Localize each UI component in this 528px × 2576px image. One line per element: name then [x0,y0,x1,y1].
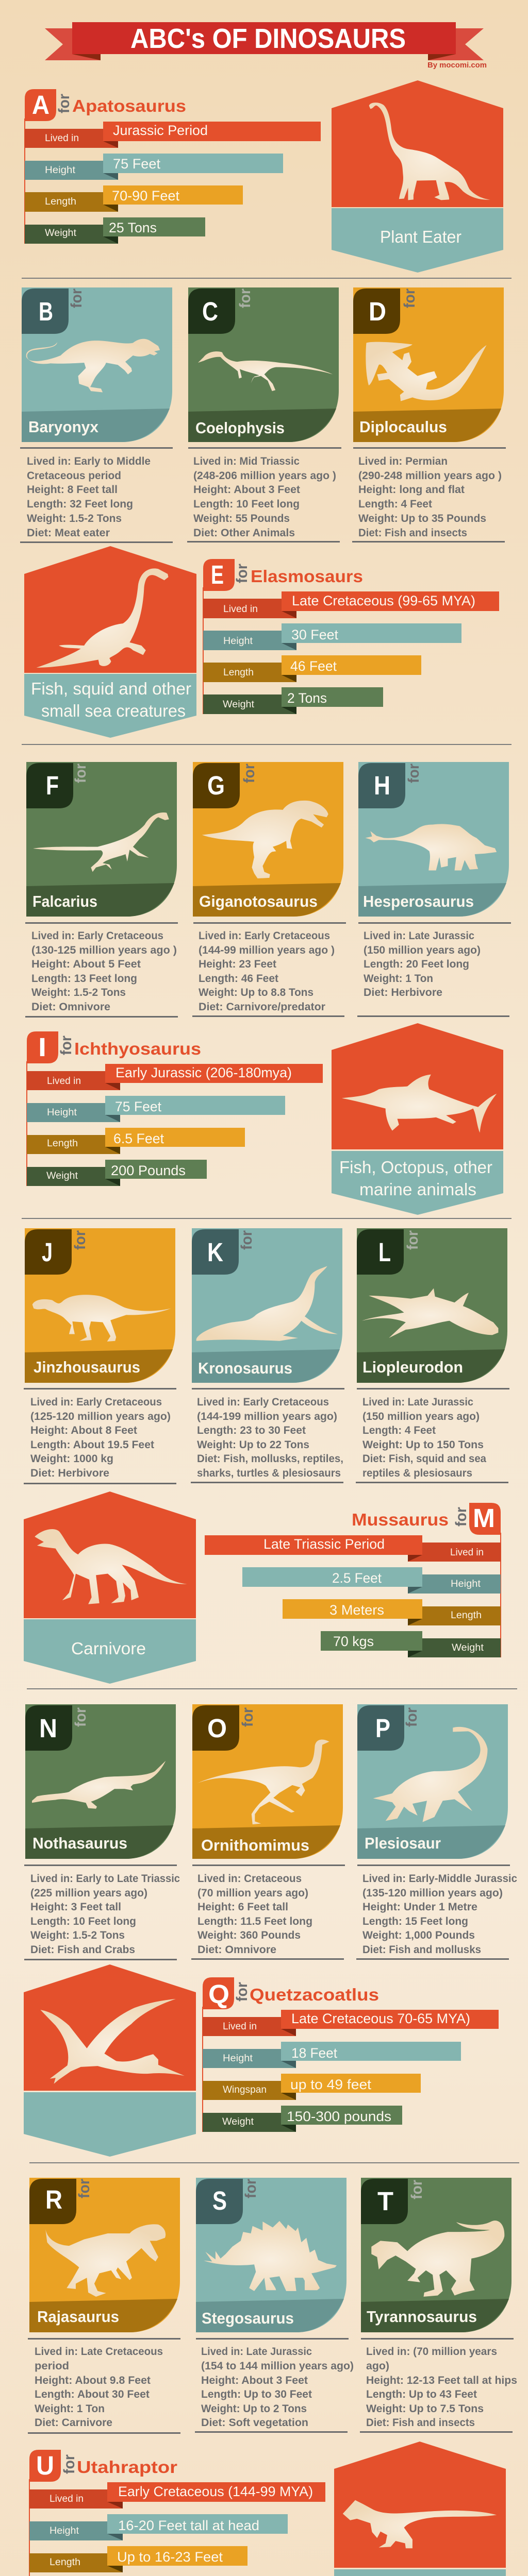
text: Coelophysis facts: (248-206 million years ago ) [193,470,336,482]
text: Stegosaurus facts: Diet: Soft vegetation [201,2417,308,2429]
panel: M Mussaurus: Mussaurus [352,1510,449,1529]
panel: G Giganotosaurus: G [207,771,225,800]
panel: L Liopleurodon: for [404,1230,421,1250]
text: Falcarius facts: Length: 13 Feet long [31,973,137,985]
text: Diplocaulus facts: Length: 4 Feet [358,498,432,510]
panel: R Rajasaurus: for [76,2179,93,2198]
panel: P Plesiosaur: for [403,1707,420,1727]
text: Ornithomimus facts: Weight: 360 Pounds [197,1929,301,1941]
panel: M Mussaurus: 70 kgs [333,1634,374,1649]
icon: Elasmosaurus silhouette [37,568,169,668]
panel: Q Quetzacoatlus [202,1977,499,2132]
panel: D Diplocaulus: Diplocaulus [359,418,447,436]
panel: I Ichthyosaurus: Height [47,1107,77,1118]
panel: E Elasmosaurs: 2 Tons [287,690,327,706]
text: Plesiosaur facts: Diet: Fish and mollusks [362,1944,481,1956]
panel: K Kronosaurus: Kronosaurus [198,1359,292,1377]
panel: J Jinzhousaurus: Jinzhousaurus [34,1358,140,1376]
panel: U Utahraptor: Utahraptor [77,2458,177,2477]
panel: O Ornithomimus: O [207,1714,227,1743]
panel: A Apatosaurus: for [56,94,73,113]
panel: Q Quetzacoatlus: 18 Feet [291,2045,337,2061]
panel: Apatosaurus diet badge [332,80,503,273]
text: Kronosaurus facts: sharks, turtles & plesiosaurs [197,1467,341,1479]
panel: B Baryonyx: B [39,297,53,326]
panel: G Giganotosaurus: for [241,764,258,783]
panel: Q Quetzacoatlus: Quetzacoatlus [250,1985,379,2004]
panel: R Rajasaurus: Rajasaurus [37,2308,119,2326]
panel: A Apatosaurus: 25 Tons [109,220,157,235]
icon: Tyrannosaurus silhouette [371,2221,504,2297]
text: Coelophysis facts: Lived in: Mid Triassic [193,455,300,467]
panel: J Jinzhousaurus: for [72,1230,89,1250]
text: Baryonyx facts: Height: 8 Feet tall [27,484,118,496]
panel: M Mussaurus: Height [451,1579,481,1589]
text: Coelophysis facts: Length: 10 Feet long [193,498,300,510]
text: Diplocaulus facts: Lived in: Permian [358,455,448,467]
icon: Utahraptor silhouette [343,2500,497,2548]
panel: Q Quetzacoatlus: Wingspan [223,2084,267,2095]
panel: Q Quetzacoatlus: Lived in [223,2021,257,2032]
text: Diplocaulus facts: Diet: Fish and insects [358,527,467,539]
text: Rajasaurus facts: Lived in: Late Cretaceous [35,2346,163,2358]
text: Plesiosaur facts [362,1873,517,1956]
panel: R Rajasaurus: R [45,2185,62,2214]
text: Falcarius facts: Height: About 5 Feet [31,958,141,970]
text: Ornithomimus facts: Diet: Omnivore [197,1944,276,1956]
text: Stegosaurus facts: Lived in: Late Jurassic [201,2346,312,2358]
panel: O Ornithomimus [191,1704,345,1960]
panel: N Nothasaurus: for [72,1707,89,1727]
panel: M Mussaurus: Length [451,1610,482,1621]
panel: Q Quetzacoatlus: Weight [222,2116,254,2127]
text: Liopleurodon facts [362,1396,486,1479]
text: Stegosaurus facts: Height: About 3 Feet [201,2375,308,2386]
text: Coelophysis facts: Weight: 55 Pounds [193,513,290,524]
text: Stegosaurus facts: Weight: Up to 2 Tons [201,2403,307,2415]
text: Nothasaurus facts: Lived in: Early to Late Triassic [30,1873,180,1885]
text: Jinzhousaurus facts: Length: About 19.5 Feet [30,1439,154,1451]
panel: U Utahraptor: for [61,2454,78,2474]
text: Baryonyx facts: Diet: Meat eater [27,527,110,539]
text: Giganotosaurus facts: Diet: Carnivore/predator [199,1001,325,1013]
text: Hesperosaurus facts: Lived in: Late Jurassic [364,930,474,942]
panel: S Stegosaurus: Stegosaurus [202,2309,294,2327]
text: Tyrannosaurus facts: Weight: Up to 7.5 Tons [366,2403,484,2415]
text: Hesperosaurus facts: Diet: Herbivore [364,987,442,998]
panel: E Elasmosaurs: Length [223,667,254,678]
panel: E Elasmosaurs: Elasmosaurs [251,567,363,586]
text: Plesiosaur facts: Height: Under 1 Metre [362,1901,477,1913]
text: Tyrannosaurus facts: Diet: Fish and insects [366,2417,475,2429]
panel: I Ichthyosaurus: Lived in [47,1076,81,1087]
text: Coelophysis facts: Diet: Other Animals [193,527,295,539]
panel: Ichthyosaurus diet badge [332,1023,503,1215]
panel: H Hesperosaurus: Hesperosaurus [363,892,474,910]
text: Plesiosaur facts: Length: 15 Feet long [362,1916,468,1927]
icon: Mussaurus silhouette [35,1529,187,1604]
text: Kronosaurus facts: Lived in: Early Cretaceous [197,1396,329,1408]
panel: D Diplocaulus: for [401,289,418,308]
panel: U Utahraptor: Length [50,2557,80,2568]
panel: S Stegosaurus: for [242,2179,259,2198]
panel: M Mussaurus: for [453,1507,470,1527]
text: Baryonyx facts: Lived in: Early to Middle [27,455,151,467]
text: Ornithomimus facts: (70 million years ago) [197,1887,308,1899]
panel: Quetzacoatlus diet badge [24,1964,196,2157]
panel: I Ichthyosaurus: Ichthyosaurus [74,1039,201,1058]
text: Nothasaurus facts: (225 million years ago) [30,1887,147,1899]
text: Liopleurodon facts: Diet: Fish, squid and sea [362,1453,486,1465]
panel: L Liopleurodon: Liopleurodon [362,1358,463,1376]
panel: K Kronosaurus: K [207,1238,223,1267]
panel: E Elasmosaurs: Weight [223,699,255,710]
text: Tyrannosaurus facts: ago) [366,2360,389,2372]
panel: E Elasmosaurs: Lived in [223,604,258,615]
panel: N Nothasaurus: N [39,1714,57,1743]
panel: G Giganotosaurus: Giganotosaurus [199,892,318,910]
text: Nothasaurus facts: Weight: 1.5-2 Tons [30,1929,125,1941]
text: Stegosaurus facts: Length: Up to 30 Feet [201,2388,312,2400]
panel: S Stegosaurus [195,2178,354,2433]
panel: O Ornithomimus: for [239,1707,256,1727]
panel: C Coelophysis: Coelophysis [195,419,285,437]
text: Falcarius facts [31,930,177,1013]
text: Falcarius facts: Diet: Omnivore [31,1001,110,1013]
panel: R Rajasaurus [28,2178,180,2434]
panel: T Tyrannosaurus: T [377,2187,393,2216]
panel: E Elasmosaurs: Late Cretaceous (99-65 MYA) [292,593,475,608]
icon: Quetzalcoatlus silhouette [40,1999,185,2084]
panel: Apatosaurus diet badge: Plant Eater [380,227,461,246]
byline: By mocomi.com [427,61,487,70]
text: Kronosaurus facts: Weight: Up to 22 Tons [197,1439,309,1451]
panel: M Mussaurus [205,1503,501,1657]
panel: Mussaurus diet badge [24,1492,196,1684]
panel: Elasmosaurs diet badge: Fish, squid and other [31,679,191,698]
panel: E Elasmosaurs: 30 Feet [291,627,338,642]
panel: M Mussaurus: 3 Meters [329,1602,384,1618]
icon: Nothasaurus silhouette [32,1761,166,1809]
text: Nothasaurus facts: Length: 10 Feet long [30,1916,136,1927]
text: Liopleurodon facts: Lived in: Late Jurassic [362,1396,473,1408]
text: Giganotosaurus facts: (144-99 million years ago ) [199,944,335,956]
panel: T Tyrannosaurus [360,2178,517,2433]
text: Hesperosaurus facts: (150 million years ago) [364,944,481,956]
panel: Q Quetzacoatlus: Height [223,2053,253,2064]
icon: Coelophysis silhouette [198,351,333,391]
panel: M Mussaurus: Weight [452,1642,484,1653]
text: Baryonyx facts: Weight: 1.5-2 Tons [27,513,122,524]
panel: A Apatosaurus: A [32,90,50,120]
panel: J Jinzhousaurus: J [42,1238,53,1267]
panel: A Apatosaurus: Weight [45,228,77,239]
text: Liopleurodon facts: Weight: Up to 150 Tons [362,1439,484,1451]
panel: U Utahraptor [29,2450,325,2576]
text: Jinzhousaurus facts: Lived in: Early Cretaceous [30,1396,162,1408]
text: Giganotosaurus facts: Length: 46 Feet [199,973,278,985]
panel: A Apatosaurus: 75 Feet [113,156,160,172]
icon: Liopleurodon silhouette [362,1289,498,1338]
text: Falcarius facts: Lived in: Early Cretaceous [31,930,163,942]
text: Plesiosaur facts: Weight: 1,000 Pounds [362,1929,475,1941]
panel: B Baryonyx: Baryonyx [28,418,99,436]
panel: M Mussaurus: M [473,1503,495,1533]
panel: U Utahraptor: Early Cretaceous (144-99 MYA) [118,2484,313,2499]
panel: L Liopleurodon [356,1228,509,1483]
panel: I Ichthyosaurus: 75 Feet [115,1099,161,1114]
icon: Baryonyx silhouette [26,339,160,393]
panel: A Apatosaurus: Lived in [45,133,79,144]
text: Ornithomimus facts [197,1873,312,1956]
panel: Utahraptor diet badge [334,2442,506,2576]
title banner [45,22,484,60]
panel: M Mussaurus: Lived in [450,1547,484,1558]
panel: B Baryonyx: for [68,289,85,308]
text: Kronosaurus facts [197,1396,343,1479]
text: Diplocaulus facts: Height: long and flat [358,484,465,496]
text: Kronosaurus facts: Length: 23 to 30 Feet [197,1425,306,1436]
panel: F Falcarius [25,762,178,1018]
panel: C Coelophysis [187,287,341,543]
text: Tyrannosaurus facts: Height: 12-13 Feet tall at hips [366,2375,517,2386]
panel: A Apatosaurus: Apatosaurus [72,96,186,115]
icon: Falcarius silhouette [33,812,169,872]
text: Rajasaurus facts: Diet: Carnivore [35,2417,112,2429]
panel: N Nothasaurus: Nothasaurus [32,1834,127,1852]
panel: L Liopleurodon: L [378,1238,391,1267]
icon: Rajasaurus silhouette [45,2224,166,2297]
text: Rajasaurus facts [35,2346,163,2429]
panel: J Jinzhousaurus [24,1228,176,1484]
panel: T Tyrannosaurus: Tyrannosaurus [367,2308,477,2326]
panel: Mussaurus diet badge: Carnivore [71,1639,146,1658]
text: Tyrannosaurus facts: Lived in: (70 million years [366,2346,497,2358]
title banner: ABC's OF DINOSAURS [130,23,406,54]
panel: E Elasmosaurs: Height [223,636,253,647]
panel: H Hesperosaurus: for [405,764,422,783]
panel: E Elasmosaurs: E [211,560,224,589]
text: Nothasaurus facts [30,1873,180,1956]
panel: U Utahraptor: U [36,2451,54,2480]
text: Liopleurodon facts: (150 million years ago) [362,1411,480,1422]
text: Ornithomimus facts: Height: 6 Feet tall [197,1901,288,1913]
panel: B Baryonyx [20,287,173,543]
text: Plesiosaur facts: Lived in: Early-Middle Jurassic [362,1873,517,1885]
panel: Elasmosaurs diet badge: small sea creatures [41,701,186,720]
icon: Apatosaurus silhouette [369,103,490,200]
text: Giganotosaurus facts: Lived in: Early Cretaceous [199,930,330,942]
text: Kronosaurus facts: (144-199 million years ago) [197,1411,337,1422]
panel: A Apatosaurus [24,89,321,244]
panel: G Giganotosaurus [192,762,346,1017]
panel: I Ichthyosaurus: Early Jurassic (206-180mya) [116,1065,292,1080]
text: Kronosaurus facts: Diet: Fish, mollusks, reptiles, [197,1453,343,1465]
panel: A Apatosaurus: Height [45,165,76,176]
text: Giganotosaurus facts: Height: 23 Feet [199,958,276,970]
text: Rajasaurus facts: period [35,2360,69,2372]
text: Nothasaurus facts: Diet: Fish and Crabs [30,1944,135,1956]
icon: Hesperosaurus silhouette [366,824,497,871]
panel: M Mussaurus: 2.5 Feet [332,1570,382,1586]
icon: Ichthyosaurus silhouette [342,1075,497,1133]
panel: K Kronosaurus: for [238,1230,255,1250]
panel: F Falcarius: Falcarius [32,892,97,910]
panel: I Ichthyosaurus: for [58,1036,75,1055]
icon: Stegosaurus silhouette [204,2221,337,2291]
text: Jinzhousaurus facts: Height: About 8 Feet [30,1425,137,1436]
panel: P Plesiosaur: Plesiosaur [365,1834,441,1852]
panel: Q Quetzacoatlus: Q [208,1979,229,2009]
text: Tyrannosaurus facts [366,2346,517,2429]
panel: Ichthyosaurus diet badge: marine animals [359,1180,476,1199]
text: Hesperosaurus facts: Weight: 1 Ton [364,973,433,985]
panel: P Plesiosaur: P [375,1714,390,1743]
panel: I Ichthyosaurus: 6.5 Feet [113,1131,164,1146]
text: Diplocaulus facts: (290-248 million years ago ) [358,470,502,482]
icon: Kronosaurus silhouette [196,1266,338,1341]
panel: I Ichthyosaurus: I [38,1032,46,1062]
panel: A Apatosaurus: Jurassic Period [113,123,208,138]
text: Falcarius facts: (130-125 million years ago ) [31,944,177,956]
text: Stegosaurus facts: (154 to 144 million years ago) [201,2360,354,2372]
panel: D Diplocaulus [352,287,506,543]
panel: Q Quetzacoatlus: for [234,1982,251,2002]
panel: U Utahraptor: Lived in [50,2494,84,2504]
text: Ornithomimus facts: Lived in: Cretaceous [197,1873,302,1885]
text: Rajasaurus facts: Length: About 30 Feet [35,2388,150,2400]
text: Falcarius facts: Weight: 1.5-2 Tons [31,987,126,998]
text: Nothasaurus facts: Height: 3 Feet tall [30,1901,121,1913]
panel: I Ichthyosaurus: 200 Pounds [111,1163,186,1178]
panel: C Coelophysis: C [202,297,218,326]
text: Tyrannosaurus facts: Length: Up to 43 Feet [366,2388,477,2400]
text: Rajasaurus facts: Weight: 1 Ton [35,2403,105,2415]
text: Rajasaurus facts: Height: About 9.8 Feet [35,2375,151,2386]
text: Baryonyx facts: Cretaceous period [27,470,121,482]
panel: E Elasmosaurs: 46 Feet [290,658,337,674]
icon: Diplocaulus silhouette [366,342,487,401]
text: Liopleurodon facts: reptiles & plesiosaurs [362,1467,472,1479]
panel: M Mussaurus: Late Triassic Period [263,1536,385,1552]
icon: Giganotosaurus silhouette [202,801,328,878]
text: Jinzhousaurus facts: (125-120 million years ago) [30,1411,171,1422]
text: Liopleurodon facts: Length: 4 Feet [362,1425,436,1436]
text: Baryonyx facts [27,455,151,539]
panel: U Utahraptor: Up to 16-23 Feet [117,2549,223,2565]
text: Hesperosaurus facts: Length: 20 Feet long [364,958,469,970]
text: Giganotosaurus facts [199,930,335,1013]
text: Ornithomimus facts: Length: 11.5 Feet long [197,1916,312,1927]
panel: I Ichthyosaurus [26,1031,323,1186]
icon: Plesiosaur silhouette [373,1727,488,1822]
panel: T Tyrannosaurus: for [408,2180,425,2199]
panel: Elasmosaurs diet badge [24,546,196,738]
panel: E Elasmosaurs: for [234,564,251,583]
panel: Q Quetzacoatlus: up to 49 feet [290,2077,372,2092]
panel: O Ornithomimus: Ornithomimus [201,1836,309,1854]
panel: K Kronosaurus [191,1228,344,1483]
panel: I Ichthyosaurus: Length [47,1138,78,1149]
text: Coelophysis facts: Height: About 3 Feet [193,484,300,496]
icon: Ornithomimus silhouette [197,1740,329,1824]
panel: N Nothasaurus [24,1704,180,1960]
panel: E Elasmosaurs [203,559,499,714]
panel: H Hesperosaurus: H [374,771,390,800]
panel: U Utahraptor: 16-20 Feet tall at head [118,2518,259,2533]
panel: P Plesiosaur [356,1704,517,1960]
text: Baryonyx facts: Length: 32 Feet long [27,498,133,510]
panel: A Apatosaurus: Length [45,196,76,207]
text: Jinzhousaurus facts: Diet: Herbivore [30,1467,109,1479]
panel: Q Quetzacoatlus: 150-300 pounds [287,2109,391,2124]
icon: Jinzhousaurus silhouette [32,1295,171,1342]
panel: I Ichthyosaurus: Weight [46,1171,78,1181]
panel: F Falcarius: for [72,764,89,783]
panel: H Hesperosaurus [357,762,511,1017]
panel: U Utahraptor: Height [50,2526,79,2536]
text: Coelophysis facts [193,455,336,539]
text: Diplocaulus facts: Weight: Up to 35 Pounds [358,513,486,524]
text: Hesperosaurus facts [364,930,481,998]
panel: Q Quetzacoatlus: Late Cretaceous 70-65 MYA) [291,2011,470,2026]
text: Giganotosaurus facts: Weight: Up to 8.8 Tons [199,987,314,998]
panel: C Coelophysis: for [237,289,254,308]
text: Plesiosaur facts: (135-120 million years ago) [362,1887,503,1899]
panel: D Diplocaulus: D [369,297,386,326]
text: Diplocaulus facts [358,455,502,539]
panel: Ichthyosaurus diet badge: Fish, Octopus, other [339,1158,492,1177]
text: Stegosaurus facts [201,2346,354,2429]
panel: S Stegosaurus: S [212,2186,227,2215]
text: Jinzhousaurus facts [30,1396,171,1479]
text: Jinzhousaurus facts: Weight: 1000 kg [30,1453,113,1465]
panel: F Falcarius: F [46,771,59,800]
panel: A Apatosaurus: 70-90 Feet [112,188,179,204]
